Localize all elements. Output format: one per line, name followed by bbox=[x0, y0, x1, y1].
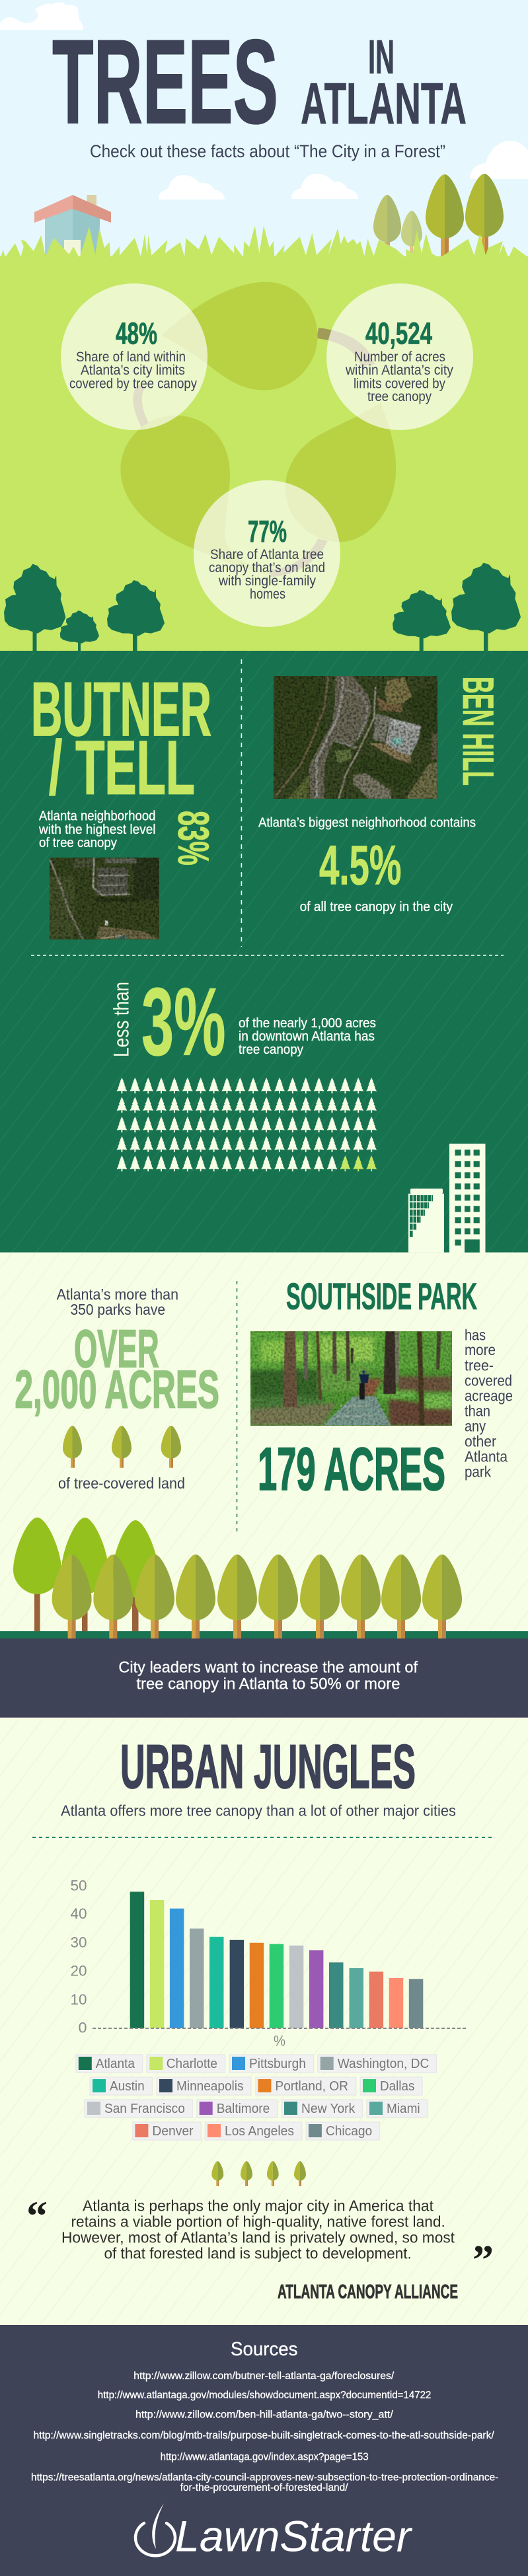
text: Butner / Tell description bbox=[38, 809, 156, 850]
panel: footer sources: http://www.atlantaga.gov/modules/showdocument.aspx?documentid=14722 bbox=[98, 2390, 431, 2401]
panel: city leaders banner: tree canopy in Atlanta to 50% or more bbox=[136, 1675, 400, 1693]
bar chart: tree canopy by city: 40 bbox=[70, 1905, 87, 1922]
panel: stat circle 48% bbox=[61, 283, 207, 430]
panel: stat circle 40,524 bbox=[326, 283, 473, 430]
pictogram: 100 trees, 3 highlighted bbox=[116, 1078, 377, 1171]
text: has more tree-covered acreage: tree- bbox=[465, 1356, 494, 1374]
heading: Ben Hill rotated: BEN HILL bbox=[454, 677, 503, 786]
panel: stat circle 48%: covered by tree canopy bbox=[69, 377, 197, 391]
subtitle: Check out these facts about “The City in a Forest” bbox=[90, 141, 445, 161]
chart legend: Minneapolis bbox=[176, 2079, 243, 2094]
text: quote: of that forested land is subject to development. bbox=[104, 2245, 412, 2262]
subtitle: urban jungles: Atlanta offers more tree canopy than a lot of other major cities bbox=[61, 1802, 456, 1819]
icon: three small trees bbox=[63, 1426, 181, 1468]
panel: stat circle 77% bbox=[194, 480, 340, 627]
text: of tree-covered land: of tree-covered land bbox=[58, 1475, 185, 1492]
text: parks intro bbox=[57, 1286, 178, 1318]
text: downtown acres: of the nearly 1,000 acres bbox=[239, 1015, 376, 1031]
icon: closing quote mark: ” bbox=[472, 2236, 494, 2283]
panel: stat circle 40,524: tree canopy bbox=[367, 389, 432, 404]
panel: footer sources: for-the-procurement-of-forested-land/ bbox=[180, 2482, 348, 2493]
panel: footer sources bbox=[0, 2325, 528, 2576]
text: has more tree-covered acreage bbox=[465, 1326, 513, 1480]
chart legend: Portland, OR bbox=[275, 2079, 348, 2094]
bar chart: tree canopy by city: 30 bbox=[70, 1934, 87, 1951]
icon: four small trees bbox=[211, 2161, 306, 2186]
image: Butner Tell aerial bbox=[50, 858, 159, 939]
text: has more tree-covered acreage: other bbox=[465, 1432, 496, 1450]
text: Butner / Tell description: Atlanta neighborhood bbox=[39, 809, 156, 824]
ground bar bbox=[0, 1631, 528, 1638]
chart legend: Chicago bbox=[326, 2124, 372, 2139]
text: Butner / Tell description: of tree canopy bbox=[39, 835, 118, 850]
text: downtown acres: in downtown Atlanta has bbox=[239, 1029, 375, 1044]
heading: over: OVER bbox=[74, 1319, 159, 1379]
text: downtown acres bbox=[239, 1015, 376, 1057]
text: parks intro: Atlanta’s more than bbox=[57, 1286, 178, 1303]
chart legend: Los Angeles bbox=[225, 2124, 294, 2139]
panel: stat circle 77%: canopy that’s on land bbox=[209, 560, 325, 575]
logo: LawnStarter: LawnStarter bbox=[175, 2512, 413, 2561]
panel: stat circle 77%: 77% bbox=[248, 514, 287, 548]
panel: stat circle 40,524: limits covered by bbox=[354, 377, 445, 391]
text: quote: Atlanta is perhaps the only major city in America that bbox=[83, 2197, 434, 2215]
trees: dark silhouettes bbox=[4, 563, 521, 651]
chart legend: Miami bbox=[387, 2102, 420, 2116]
text: of all tree canopy: of all tree canopy in the city bbox=[300, 899, 453, 914]
panel: footer sources: http://www.zillow.com/ben-hill-atlanta-ga/two--story_att/ bbox=[135, 2409, 393, 2420]
trees: bright green back row bbox=[13, 1518, 159, 1632]
bar chart: tree canopy by city bbox=[70, 1878, 467, 2049]
text: downtown acres: tree canopy bbox=[239, 1042, 304, 1057]
bar chart: tree canopy by city: 20 bbox=[70, 1963, 87, 1979]
panel: stat circle 77%: Share of Atlanta tree bbox=[210, 547, 324, 562]
panel: stat circle 40,524: within Atlanta’s city bbox=[345, 363, 453, 378]
heading: 2,000 acres: 2,000 ACRES bbox=[15, 1360, 219, 1420]
panel: stat circle 48%: Atlanta’s city limits bbox=[81, 363, 185, 378]
bar chart: tree canopy by city: 0 bbox=[78, 2020, 87, 2036]
panel: stat circle 48%: 48% bbox=[116, 316, 157, 350]
bar chart: tree canopy by city: 50 bbox=[70, 1878, 87, 1894]
image: Southside Park cyclist photo bbox=[250, 1331, 452, 1426]
stat: 3%: 3% bbox=[141, 968, 226, 1076]
text: has more tree-covered acreage: any bbox=[465, 1418, 486, 1435]
panel: cream parks section bbox=[0, 1253, 528, 2325]
panel: city leaders banner bbox=[0, 1638, 528, 1718]
chart legend: Pittsburgh bbox=[249, 2057, 306, 2071]
text: has more tree-covered acreage: has bbox=[465, 1326, 486, 1343]
panel: footer sources: http://www.singletracks.com/blog/mtb-trails/purpose-built-singletrack-comes-to-the-atl-southside-park/ bbox=[33, 2430, 494, 2441]
text: parks intro: 350 parks have bbox=[70, 1301, 165, 1318]
chart legend bbox=[76, 2055, 436, 2140]
panel: stat circle 77%: with single-family bbox=[218, 573, 316, 589]
panel: stat circle 77%: homes bbox=[250, 587, 285, 602]
title: TREES: TREES bbox=[52, 15, 278, 149]
panel: footer sources: Sources bbox=[231, 2339, 297, 2360]
text: Ben Hill biggest neighborhood: Atlanta’s biggest neighhorhood contains bbox=[258, 815, 476, 830]
chart legend: Baltimore bbox=[217, 2102, 270, 2116]
icon: house bbox=[34, 195, 111, 258]
bar chart: tree canopy by city: 10 bbox=[70, 1991, 87, 2008]
text: quote: However, most of Atlanta’s land is privately owned, so most bbox=[61, 2229, 455, 2246]
text: quote: retains a viable portion of high-quality, native forest land. bbox=[71, 2213, 445, 2230]
heading: Butner: BUTNER bbox=[31, 667, 211, 752]
chart legend: Atlanta bbox=[96, 2057, 135, 2071]
panel: stat circle 40,524: Number of acres bbox=[354, 350, 445, 365]
panel: stat circle 48%: Share of land within bbox=[76, 350, 186, 365]
panel: dark green neighborhoods section bbox=[0, 651, 528, 1253]
text: Less than rotated: Less than bbox=[110, 982, 133, 1057]
chart legend: Denver bbox=[152, 2124, 194, 2139]
chart legend: San Francisco bbox=[104, 2102, 185, 2116]
text: has more tree-covered acreage: park bbox=[465, 1463, 491, 1480]
text: Butner / Tell description: with the highest level bbox=[38, 822, 156, 837]
text: has more tree-covered acreage: acreage bbox=[465, 1387, 513, 1405]
trees: hilltop group bbox=[373, 174, 504, 258]
panel: city leaders banner: City leaders want to increase the amount of bbox=[118, 1659, 418, 1677]
stat: 4.5%: 4.5% bbox=[319, 834, 402, 897]
text: has more tree-covered acreage: more bbox=[465, 1341, 496, 1358]
chart legend: Charlotte bbox=[167, 2057, 217, 2071]
chart legend: Washington, DC bbox=[338, 2057, 429, 2071]
text: has more tree-covered acreage: covered bbox=[465, 1372, 512, 1389]
panel: stat circle 40,524: 40,524 bbox=[365, 316, 432, 350]
panel: footer sources: http://www.atlantaga.gov/index.aspx?page=153 bbox=[161, 2451, 369, 2462]
sky background bbox=[0, 0, 528, 264]
panel: footer sources: http://www.zillow.com/butner-tell-atlanta-ga/foreclosures/ bbox=[133, 2371, 395, 2382]
stat: 83% rotated: 83% bbox=[169, 811, 218, 865]
panel: grass field bbox=[0, 226, 528, 651]
heading: / Tell: / TELL bbox=[49, 725, 195, 810]
icon: buildings bbox=[408, 1144, 485, 1253]
text: has more tree-covered acreage: Atlanta bbox=[465, 1448, 508, 1465]
panel: tree-shaped blobs and stems bbox=[120, 282, 396, 575]
chart legend: Austin bbox=[110, 2079, 145, 2094]
text: has more tree-covered acreage: than bbox=[465, 1402, 490, 1419]
trees: olive front row bbox=[52, 1555, 462, 1638]
chart legend: New York bbox=[301, 2102, 356, 2116]
clouds bbox=[0, 3, 528, 200]
panel: footer sources: https://treesatlanta.org/news/atlanta-city-council-approves-new-subsection-to-tree-protection-ordinance- bbox=[31, 2472, 498, 2483]
title: IN: IN bbox=[368, 31, 395, 84]
text: quote bbox=[61, 2197, 455, 2262]
image: Ben Hill aerial bbox=[274, 676, 437, 799]
bar chart: tree canopy by city: % bbox=[274, 2033, 285, 2049]
icon: opening quote mark: “ bbox=[26, 2192, 48, 2239]
chart legend: Dallas bbox=[380, 2079, 414, 2094]
